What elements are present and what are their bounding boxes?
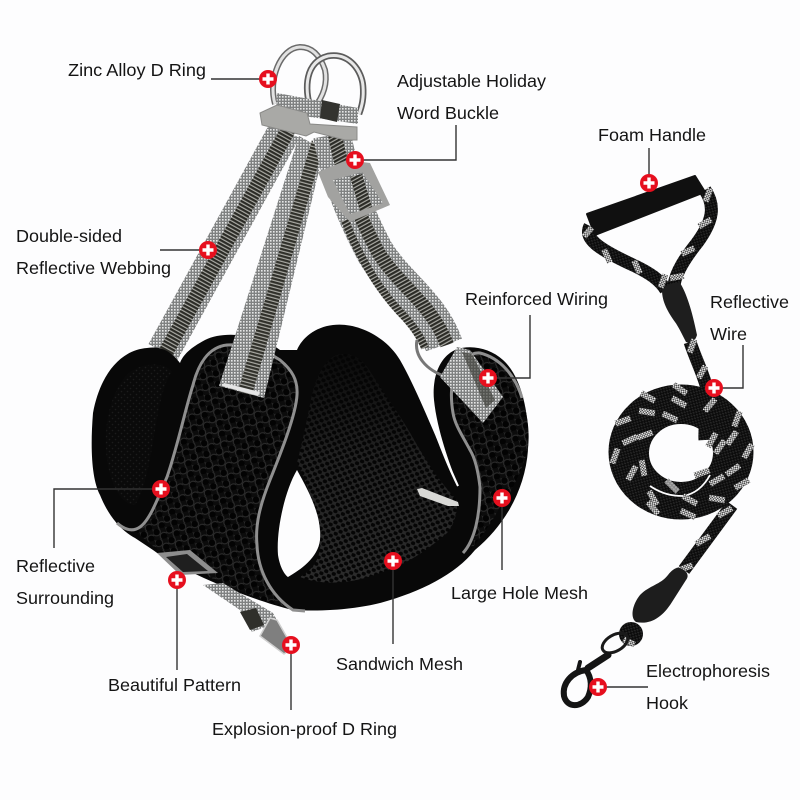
center strap lower stitching xyxy=(222,383,260,396)
left strap xyxy=(163,130,288,352)
marker: large hole mesh xyxy=(493,489,511,507)
front panel mesh xyxy=(135,345,297,608)
label: adjustable holiday word buckle: Word Buckle xyxy=(397,103,499,123)
label: reflective wire: Reflective xyxy=(710,292,789,312)
marker: zinc alloy D ring xyxy=(259,70,277,88)
label: reflective wire: Wire xyxy=(710,324,747,344)
harness xyxy=(92,47,529,654)
leash xyxy=(564,176,752,705)
center teardrop opening xyxy=(278,470,320,577)
marker: beautiful pattern xyxy=(168,571,186,589)
label: adjustable holiday word buckle: Adjustable Holiday xyxy=(397,71,546,91)
label: reflective surrounding: Surrounding xyxy=(16,588,114,608)
foam handle xyxy=(587,176,705,235)
label: reflective wire xyxy=(710,292,789,344)
electrophoresis snap hook xyxy=(564,655,608,705)
adjustable holiday word buckle xyxy=(318,160,390,222)
label: double-sided reflective webbing: Double-sided xyxy=(16,226,122,246)
marker: holiday word buckle xyxy=(346,151,364,169)
white gap in coil xyxy=(650,475,710,496)
marker: reflective surrounding xyxy=(152,480,170,498)
explosion-proof metal clasp xyxy=(260,618,293,654)
reflective piping: front panel xyxy=(117,345,305,611)
marker: reflective wire xyxy=(705,379,723,397)
center strap xyxy=(219,136,324,398)
label: adjustable holiday word buckle xyxy=(397,71,546,123)
marker: electrophoresis hook xyxy=(589,678,607,696)
label: large hole mesh: Large Hole Mesh xyxy=(451,583,588,603)
marker: foam handle xyxy=(640,174,658,192)
lower rope collar xyxy=(633,568,688,623)
label: explosion-proof D ring: Explosion-proof D Ring xyxy=(212,719,397,739)
rope from collar into coil xyxy=(690,342,708,440)
label: foam handle: Foam Handle xyxy=(598,125,706,145)
left cup inner mesh xyxy=(106,364,172,505)
label: reinforced wiring: Reinforced Wiring xyxy=(465,289,608,309)
marker: sandwich mesh xyxy=(384,552,402,570)
reflective piping: right panel xyxy=(451,353,522,553)
label: double-sided reflective webbing xyxy=(16,226,171,278)
upper rope collar xyxy=(662,283,697,343)
bottom strap xyxy=(203,583,278,632)
top strap loop xyxy=(276,93,358,124)
rope end knot xyxy=(619,622,643,646)
rope from coil to lower collar xyxy=(684,505,732,570)
lower right D ring xyxy=(417,340,447,377)
label: electrophoresis hook xyxy=(646,661,770,713)
coiled rope xyxy=(616,392,746,512)
label: double-sided reflective webbing: Reflective Webbing xyxy=(16,258,171,278)
far panel top shading xyxy=(297,354,457,583)
marker: reinforced wiring xyxy=(479,369,497,387)
side slit opening xyxy=(434,428,458,486)
handle loop rope xyxy=(589,190,711,290)
far panel fine mesh xyxy=(297,354,457,583)
label: zinc alloy D ring: Zinc Alloy D Ring xyxy=(68,60,206,80)
harness body silhouette xyxy=(92,325,528,611)
label: electrophoresis hook: Hook xyxy=(646,693,688,713)
pattern tag xyxy=(157,550,218,575)
swivel ring xyxy=(599,629,631,657)
marker: explosion-proof D ring xyxy=(282,636,300,654)
right strap xyxy=(332,135,447,348)
label: reflective surrounding: Reflective xyxy=(16,556,95,576)
label: reflective surrounding xyxy=(16,556,114,608)
label: electrophoresis hook: Electrophoresis xyxy=(646,661,770,681)
label: sandwich mesh: Sandwich Mesh xyxy=(336,654,463,674)
leader lines xyxy=(54,79,743,710)
right panel mesh xyxy=(451,353,529,550)
label: beautiful pattern: Beautiful Pattern xyxy=(108,675,241,695)
side release buckle xyxy=(260,105,357,140)
small metal tab xyxy=(417,488,459,506)
reflective patches on rope xyxy=(584,188,752,571)
marker: reflective webbing xyxy=(199,241,217,259)
icon: zinc alloy D rings xyxy=(273,47,363,114)
reinforced strap tab xyxy=(440,347,503,423)
